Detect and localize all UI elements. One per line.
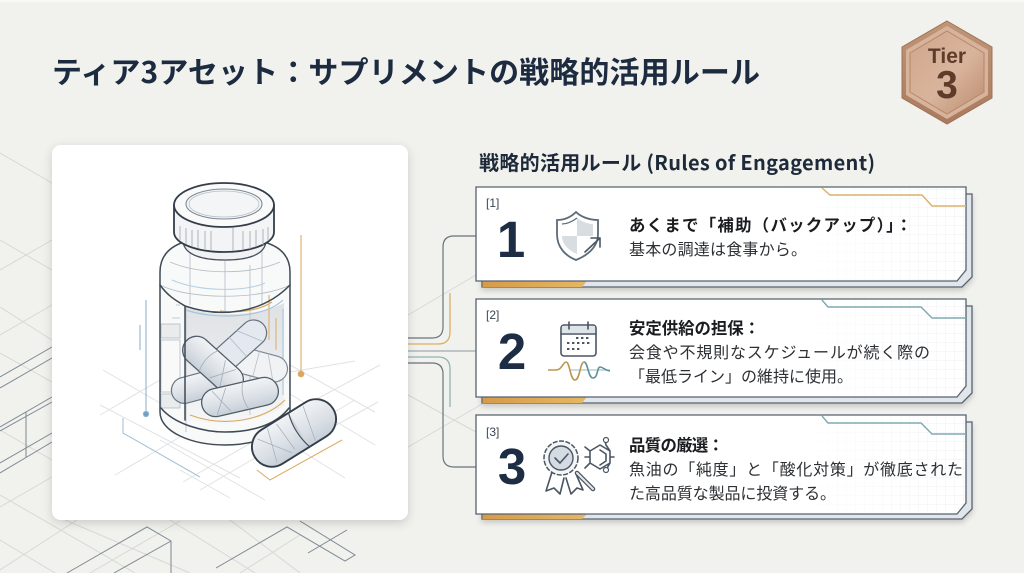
badge: Tier 3 bronze hexagon: Tier	[928, 45, 966, 68]
bottle	[160, 183, 290, 445]
section heading: 戦略的活用ルール (Rules of Engagement)	[479, 147, 875, 176]
card 3	[476, 415, 972, 519]
card 3 text	[629, 432, 963, 504]
bottle facet lines	[160, 245, 290, 432]
card 2	[476, 299, 972, 403]
card 3 text: た高品質な製品に投資する。	[629, 480, 836, 504]
card 3 text: 魚油の「純度」と「酸化対策」が徹底された	[629, 456, 963, 480]
badge: Tier 3 bronze hexagon: 3	[936, 64, 958, 107]
number 1: 1	[497, 211, 525, 268]
card 2 text: 安定供給の担保：	[629, 315, 760, 339]
card 1 text: 基本の調達は食事から。	[629, 236, 807, 260]
card 2 text	[629, 315, 930, 387]
icon: award rosette with magnifier and molecule	[544, 438, 614, 494]
card 3 text: 品質の厳選：	[629, 432, 724, 456]
blue guide with node	[123, 300, 200, 477]
floor grid	[100, 361, 380, 500]
dark architectural lines	[0, 347, 355, 573]
cap	[174, 183, 274, 252]
gold guide with node	[257, 235, 342, 480]
number 3: 3	[498, 438, 526, 495]
neck	[183, 232, 266, 260]
number 2: 2	[498, 323, 526, 380]
panel: supplement bottle illustration	[52, 145, 408, 520]
label [2]: [2]	[486, 308, 499, 322]
card 1 text: あくまで「補助（バックアップ）」：	[629, 212, 912, 236]
label [3]: [3]	[486, 425, 499, 439]
icon: shield with arrow	[557, 212, 600, 260]
connector lines	[408, 236, 476, 467]
title: ティア3アセット：サプリメントの戦略的活用ルール	[52, 48, 760, 92]
isometric background grid	[0, 153, 482, 573]
card 2 text: 「最低ライン」の維持に使用。	[629, 363, 853, 387]
label [1]: [1]	[486, 196, 499, 210]
card 1	[476, 187, 972, 287]
card 2 text: 会食や不規則なスケジュールが続く際の	[629, 339, 930, 363]
badge: Tier 3 bronze hexagon	[902, 21, 992, 124]
card 1 text	[629, 212, 912, 260]
loose capsule	[244, 392, 344, 474]
icon: calendar with wave	[548, 322, 610, 380]
bottle window	[185, 303, 284, 423]
capsules inside bottle	[169, 315, 290, 419]
